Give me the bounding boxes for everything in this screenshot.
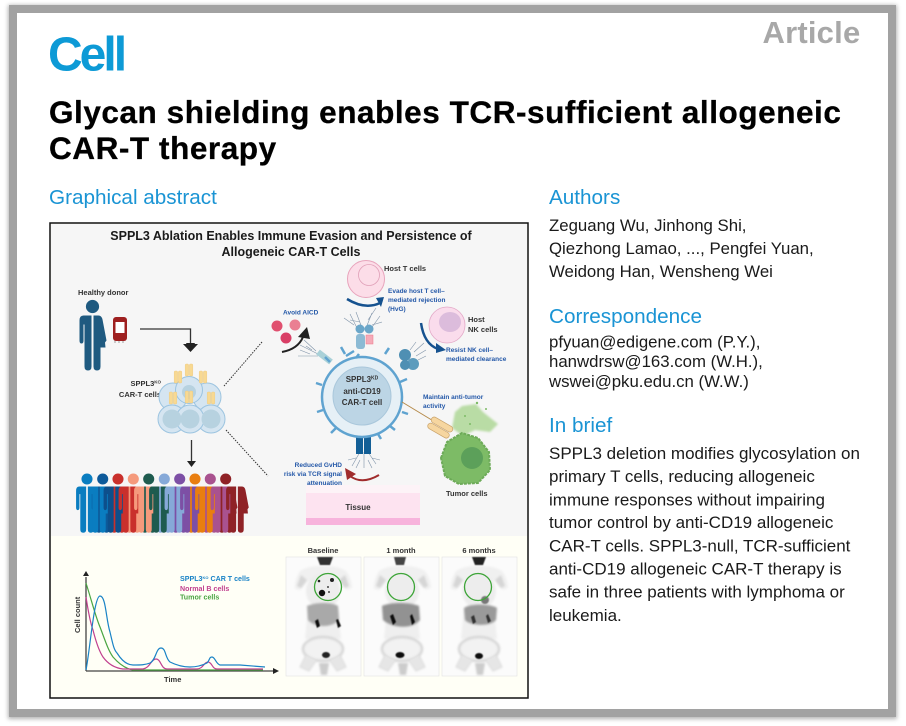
host T cell: Host T cells bbox=[384, 264, 426, 273]
tumor cells and CAR binding bbox=[402, 394, 498, 498]
dead cells: avoid AICD bbox=[272, 310, 319, 352]
panel: graphical abstract bbox=[50, 223, 528, 698]
SPPL3 KD CAR-T cell cluster: CAR-T cells bbox=[119, 390, 161, 399]
heading: graphical abstract: Graphical abstract bbox=[49, 186, 217, 209]
PET scans bbox=[286, 546, 517, 676]
title bbox=[49, 94, 841, 166]
central CAR-T cell: CAR-T cell bbox=[342, 398, 382, 407]
curve: normal B cells bbox=[86, 597, 263, 669]
sidebar: authors bbox=[549, 186, 814, 281]
dead cells: avoid AICD: Avoid AICD bbox=[283, 310, 319, 316]
abstract heading bbox=[110, 229, 473, 259]
abstract heading: SPPL3 Ablation Enables Immune Evasion and Persistence of bbox=[110, 229, 473, 243]
title: CAR-T therapy bbox=[49, 130, 277, 166]
central CAR-T cell bbox=[298, 308, 426, 468]
GvHD reduction bbox=[284, 462, 379, 487]
legend: Tumor cells bbox=[180, 594, 219, 602]
legend: SPPL3 bbox=[180, 575, 202, 583]
tissue bbox=[306, 485, 420, 525]
central CAR-T cell: anti-CD19 bbox=[343, 387, 381, 396]
line chart: cell counts over time: Time bbox=[164, 675, 181, 684]
host T cell: mediated rejection bbox=[388, 297, 445, 304]
sidebar: in brief: SPPL3 deletion modifies glycosylation on bbox=[549, 444, 860, 463]
sidebar: in brief: anti-CD19 allogeneic CAR-T therapy is bbox=[549, 560, 842, 578]
line chart: cell counts over time bbox=[73, 571, 279, 684]
dotted connectors bbox=[224, 342, 268, 476]
arrow: cells to patients bbox=[187, 440, 196, 467]
host NK cell: NK cells bbox=[468, 325, 498, 334]
arrow: donor to CAR-T bbox=[140, 329, 198, 352]
patients crowd bbox=[76, 473, 249, 533]
sidebar: correspondence: Correspondence bbox=[549, 305, 702, 328]
sidebar: correspondence: pfyuan@edigene.com (P.Y.), bbox=[549, 332, 760, 352]
GvHD reduction: Reduced GvHD bbox=[295, 462, 342, 469]
tumor cells and CAR binding: activity bbox=[423, 403, 446, 410]
axis labels: Cell count bbox=[73, 596, 82, 633]
PET scans: 1 month bbox=[386, 546, 416, 555]
central CAR-T cell: SPPL3 bbox=[346, 375, 371, 384]
abstract heading: Allogeneic CAR-T Cells bbox=[222, 245, 360, 259]
host NK cell: mediated clearance bbox=[446, 356, 507, 363]
scan: 6 months bbox=[442, 557, 517, 676]
host NK cell: Host bbox=[468, 315, 485, 324]
axes bbox=[86, 577, 273, 671]
host NK cell bbox=[421, 307, 507, 363]
sidebar: correspondence: hanwdrsw@163.com (W.H.), bbox=[549, 352, 763, 371]
scan: 1 month bbox=[364, 557, 439, 676]
tissue: Tissue bbox=[345, 503, 371, 512]
SPPL3 KD CAR-T cell cluster: SPPL3 bbox=[130, 379, 154, 388]
GvHD reduction: risk via TCR signal bbox=[284, 471, 342, 478]
sidebar: in brief: primary T cells, reducing allogeneic bbox=[549, 467, 815, 486]
host T cell: Evade host T cell– bbox=[388, 288, 445, 295]
sidebar: authors: Authors bbox=[549, 186, 620, 209]
legend: Normal B cells bbox=[180, 585, 229, 593]
curve: tumor bbox=[86, 583, 263, 670]
healthy donor: Healthy donor bbox=[78, 288, 129, 297]
SPPL3 KD CAR-T cell cluster: KO bbox=[154, 380, 161, 384]
curve: CAR-T bbox=[86, 596, 265, 670]
sidebar: authors: Qiezhong Lamao, ..., Pengfei Yuan, bbox=[549, 239, 814, 258]
legend: CAR T cells bbox=[208, 575, 250, 583]
sidebar: authors: Zeguang Wu, Jinhong Shi, bbox=[549, 216, 746, 235]
sidebar: authors: Weidong Han, Wensheng Wei bbox=[549, 262, 773, 281]
legend: KO bbox=[202, 575, 208, 580]
sidebar: in brief: In brief bbox=[549, 414, 612, 437]
sidebar: in brief bbox=[549, 414, 860, 625]
host T cell: (HvG) bbox=[388, 306, 406, 313]
sidebar: correspondence bbox=[548, 305, 763, 391]
healthy donor bbox=[78, 288, 129, 370]
PET scans: 6 months bbox=[462, 546, 496, 555]
journal logo: Cell: Cell bbox=[48, 28, 124, 82]
sidebar: in brief: CAR-T cells. SPPL3-null, TCR-sufficient bbox=[549, 536, 851, 556]
sidebar: in brief: immune responses without impairing bbox=[549, 490, 825, 510]
tumor cells and CAR binding: Tumor cells bbox=[446, 489, 488, 498]
host NK cell: Resist NK cell– bbox=[446, 347, 493, 354]
legend bbox=[180, 575, 250, 602]
sidebar: in brief: safe in three patients with lymphoma or bbox=[549, 582, 845, 602]
SPPL3 KD CAR-T cell cluster bbox=[119, 364, 225, 433]
receptors bbox=[318, 324, 419, 454]
central CAR-T cell: KD bbox=[371, 376, 379, 382]
sidebar: in brief: leukemia. bbox=[549, 606, 622, 625]
article label: Article bbox=[762, 15, 860, 50]
host T cell bbox=[347, 260, 445, 313]
GvHD reduction: attenuation bbox=[307, 480, 342, 487]
title: Glycan shielding enables TCR-sufficient allogeneic bbox=[49, 94, 841, 130]
icon: blood bag bbox=[113, 317, 127, 343]
tumor cells and CAR binding: Maintain anti-tumor bbox=[423, 394, 484, 401]
sidebar: in brief: tumor control by anti-CD19 allogeneic bbox=[549, 513, 834, 532]
PET scans: Baseline bbox=[308, 546, 338, 555]
scan: baseline bbox=[286, 557, 361, 676]
sidebar: correspondence: wswei@pku.edu.cn (W.W.) bbox=[548, 372, 749, 391]
